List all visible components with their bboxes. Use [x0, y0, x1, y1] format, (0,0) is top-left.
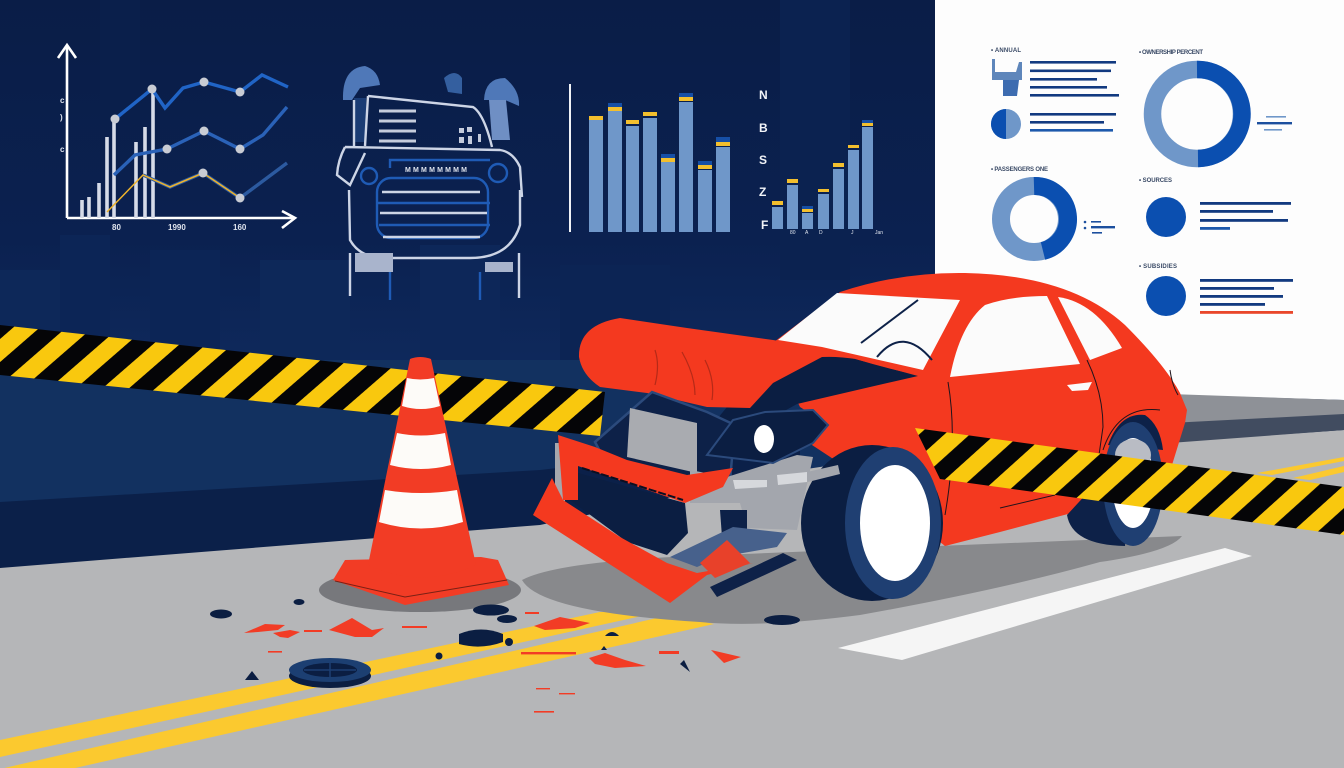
- donut: [1001, 186, 1068, 252]
- lower bumper: [533, 478, 753, 603]
- hood creases: [655, 350, 713, 400]
- chart axis labels: 1990: [168, 223, 186, 232]
- panel: lower stats: [1139, 264, 1293, 316]
- crumpled hood: [579, 318, 918, 408]
- road: [0, 394, 1344, 768]
- chart axis labels: 80: [112, 223, 121, 232]
- labels B: [790, 230, 883, 236]
- circle: [1146, 197, 1186, 237]
- truck grille: [377, 178, 490, 238]
- truck mirrors: [343, 66, 519, 142]
- chart axis labels: ): [60, 113, 63, 122]
- door handle: [1067, 382, 1092, 391]
- car: [533, 273, 1344, 603]
- truck blueprint: [337, 66, 522, 300]
- panel: top donut: [1139, 50, 1292, 158]
- label: • SOURCES: [1139, 178, 1172, 184]
- truck cab: [354, 96, 492, 147]
- text bars: [1200, 279, 1293, 314]
- bars B: [772, 127, 873, 229]
- chart: line and bar trend: [58, 45, 295, 232]
- car shadow: [522, 536, 1182, 624]
- road debris: [210, 599, 800, 713]
- detached wheel: [289, 658, 371, 688]
- chart lines: [107, 75, 288, 212]
- bumper debris: [670, 527, 797, 597]
- panel: left donut: [991, 167, 1115, 252]
- door lines: [945, 360, 1178, 515]
- suspension arm: [807, 465, 840, 482]
- lower wall bands: [0, 360, 935, 580]
- labels B: 80: [790, 230, 796, 236]
- label: • OWNERSHIP PERCENT: [1139, 50, 1203, 56]
- hazard tape: left: [0, 325, 605, 436]
- text bars: [1030, 61, 1119, 132]
- cone body: [368, 357, 476, 578]
- bar chart A: [570, 84, 730, 232]
- car body: [770, 273, 1187, 546]
- chart axis labels: [60, 96, 247, 232]
- dark fragments: [210, 599, 800, 680]
- upper bumper bar: [558, 435, 733, 503]
- rear wheel: [1067, 415, 1163, 546]
- labels B: D: [819, 230, 823, 236]
- truck hood: [337, 147, 522, 197]
- engine cavity: [700, 350, 918, 440]
- cone base outline: [335, 580, 507, 597]
- cab buttons: [459, 127, 481, 144]
- text bars: [1200, 202, 1291, 230]
- donut: [1152, 69, 1242, 158]
- bar caps B: [772, 123, 873, 212]
- red splatters: [244, 612, 741, 713]
- icon: machine: [992, 59, 1022, 96]
- side windows: [950, 296, 1122, 377]
- labels B: J: [851, 230, 854, 236]
- legend: [1257, 116, 1292, 131]
- white lane marking: [838, 548, 1252, 660]
- headlight: [707, 410, 828, 463]
- cone base: [333, 557, 509, 605]
- truck headlights: [361, 160, 507, 184]
- chart markers: [110, 78, 244, 202]
- cone stripes: [379, 378, 463, 528]
- axis letters B: Z: [759, 185, 766, 199]
- axis letters B: F: [761, 218, 768, 232]
- label: • PASSENGERS ONE: [991, 167, 1048, 173]
- circle: [1146, 276, 1186, 316]
- chart axis labels: c: [60, 96, 65, 105]
- axis letters B: [759, 88, 768, 232]
- exposed frame: [595, 392, 735, 480]
- chart bars: [82, 90, 153, 218]
- panel: top left stats: [991, 48, 1119, 139]
- axis letters B: S: [759, 153, 767, 167]
- chart axes: [58, 45, 295, 228]
- bumper grille slit: [582, 468, 683, 500]
- bar chart B: [759, 88, 883, 236]
- traffic cone: [319, 357, 521, 612]
- cone shadow: [319, 568, 521, 612]
- bar caps A: [589, 97, 730, 169]
- labels B: Jan: [875, 230, 883, 236]
- labels B: A: [805, 230, 809, 236]
- axis letters B: B: [759, 121, 768, 135]
- dark grille: [570, 473, 688, 555]
- label: • SUBSIDIES: [1139, 264, 1177, 270]
- front wheel: [801, 445, 943, 601]
- bars A: [589, 102, 730, 232]
- background wall: [0, 0, 935, 400]
- axis letters B: N: [759, 88, 768, 102]
- white infographic wall: [935, 0, 1344, 400]
- grey mechanical parts: [555, 443, 813, 537]
- cab panel lines: [379, 111, 416, 141]
- windshield: [778, 293, 960, 370]
- hazard tape: right: [915, 428, 1344, 535]
- label: • ANNUAL: [991, 48, 1021, 54]
- legend: [1084, 221, 1115, 234]
- pie: [991, 109, 1021, 139]
- panel: middle stats: [1139, 178, 1291, 237]
- truck bumper and legs: [349, 190, 520, 298]
- radiator: [627, 408, 697, 473]
- axis A: [569, 84, 571, 232]
- truck badge text: MMMMMMMM: [405, 167, 467, 174]
- chart axis labels: c: [60, 145, 65, 154]
- double yellow centre line: [0, 457, 1344, 768]
- chart axis labels: 160: [233, 223, 247, 232]
